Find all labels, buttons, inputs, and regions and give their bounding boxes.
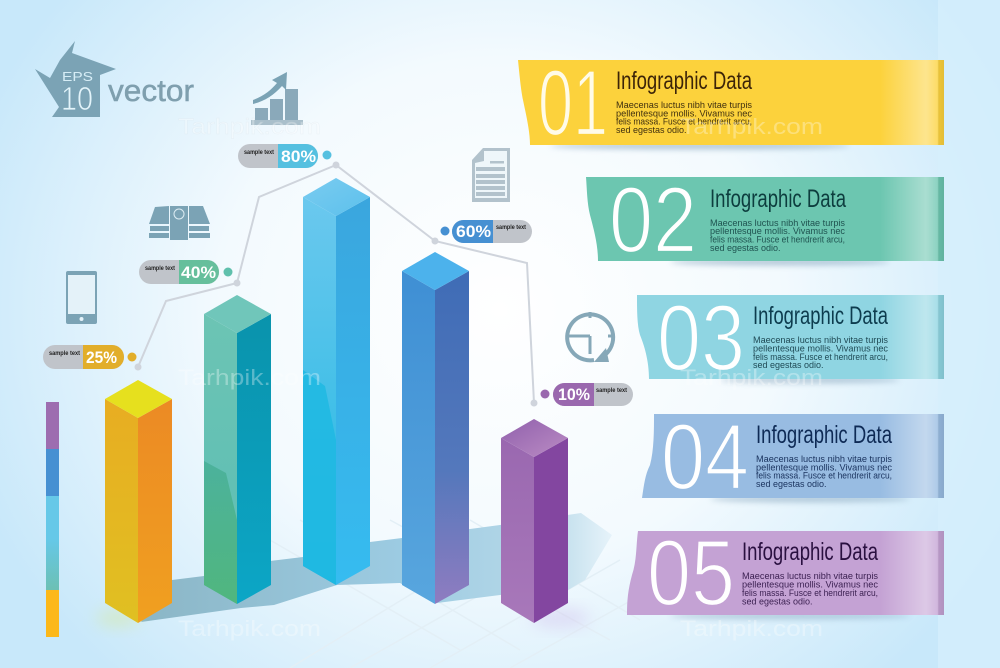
body 04: sed egestas odio. bbox=[756, 479, 827, 489]
panel: ribbon 03 bbox=[637, 285, 944, 390]
heading 01: Infographic Data bbox=[616, 67, 752, 95]
watermarks bbox=[178, 114, 823, 641]
body 03: sed egestas odio. bbox=[753, 360, 824, 370]
logo: EPS 10 vector: EPS bbox=[62, 69, 93, 84]
bar shadows on floor bbox=[141, 513, 612, 622]
body 01: felis massa. Fusce et hendrerit arcu, bbox=[616, 116, 752, 126]
body 01: Maecenas luctus nibh vitae turpis bbox=[616, 100, 753, 110]
body 03: felis massa. Fusce et hendrerit arcu, bbox=[753, 352, 888, 362]
bar 40% green bbox=[204, 295, 271, 604]
icon: document bbox=[472, 148, 510, 202]
pill: 80% bbox=[238, 144, 332, 168]
logo: EPS 10 vector: 10 bbox=[61, 80, 93, 117]
pill: 40% bbox=[139, 260, 232, 284]
pill: 60% bbox=[440, 220, 532, 243]
floor grid bbox=[270, 520, 650, 668]
heading 03: Infographic Data bbox=[753, 302, 888, 330]
watermarks: Tarhpik.com bbox=[178, 365, 321, 390]
number 03: 03 bbox=[657, 285, 745, 390]
bar 80% light blue bbox=[303, 178, 370, 585]
panel: ribbon 04 bbox=[642, 404, 944, 509]
legend colour strip bbox=[46, 402, 59, 637]
body 04: felis massa. Fusce et hendrerit arcu, bbox=[756, 470, 892, 480]
bar 10% purple bbox=[501, 419, 568, 623]
body 04 bbox=[756, 454, 893, 489]
body 05 bbox=[742, 571, 879, 606]
number 05: 05 bbox=[647, 520, 735, 625]
body 05: Maecenas luctus nibh vitae turpis bbox=[742, 571, 879, 581]
pill: 10% bbox=[540, 383, 633, 406]
icon: growth chart bbox=[251, 72, 303, 125]
pill: 25%: 25% bbox=[86, 348, 117, 367]
body 03 bbox=[753, 335, 889, 370]
body 05: sed egestas odio. bbox=[742, 596, 813, 606]
panel: ribbon 02 bbox=[586, 167, 944, 272]
pill: 25% bbox=[43, 345, 136, 369]
body 02 bbox=[710, 218, 846, 253]
pill: 40%: sample text bbox=[145, 266, 175, 272]
number 01: 01 bbox=[538, 50, 608, 155]
pill: 60%: sample text bbox=[496, 225, 526, 231]
watermarks: Tarhpik.com bbox=[680, 114, 823, 139]
body 03: Maecenas luctus nibh vitae turpis bbox=[753, 335, 888, 345]
pill: 60%: 60% bbox=[456, 222, 491, 241]
logo: EPS 10 vector: vector bbox=[108, 73, 194, 108]
icon: clock bbox=[566, 312, 614, 362]
watermarks: Tarhpik.com bbox=[680, 616, 823, 641]
watermarks: Tarhpik.com bbox=[680, 365, 823, 390]
heading 05: Infographic Data bbox=[742, 538, 878, 566]
body 02: sed egestas odio. bbox=[710, 243, 781, 253]
body 02: pellentesque mollis. Vivamus nec bbox=[710, 226, 846, 236]
bar 25% yellow bbox=[105, 380, 172, 623]
body 02: Maecenas luctus nibh vitae turpis bbox=[710, 218, 845, 228]
bar 60% blue bbox=[402, 252, 469, 604]
heading 02: Infographic Data bbox=[710, 185, 846, 213]
pill: 40%: 40% bbox=[181, 263, 216, 282]
right side strip bbox=[938, 0, 1000, 668]
body 04: Maecenas luctus nibh vitae turpis bbox=[756, 454, 893, 464]
pill: 25%: sample text bbox=[49, 351, 80, 357]
body 03: pellentesque mollis. Vivamus nec bbox=[753, 344, 889, 354]
number 04: 04 bbox=[661, 404, 749, 509]
connector line bbox=[134, 162, 538, 406]
icon: tablet bbox=[66, 271, 97, 324]
body 01: sed egestas odio. bbox=[616, 125, 687, 135]
body 04: pellentesque mollis. Vivamus nec bbox=[756, 462, 893, 472]
pill: 10%: sample text bbox=[596, 388, 627, 394]
logo: EPS 10 vector bbox=[35, 41, 194, 117]
bar glows bbox=[96, 608, 590, 628]
icon: money stack bbox=[149, 206, 210, 240]
heading 04: Infographic Data bbox=[756, 421, 892, 449]
body 01 bbox=[616, 100, 753, 135]
panel: ribbon 05 bbox=[627, 520, 944, 625]
watermarks: Tarhpik.com bbox=[178, 114, 321, 139]
body 05: pellentesque mollis. Vivamus nec bbox=[742, 580, 879, 590]
body 05: felis massa. Fusce et hendrerit arcu, bbox=[742, 588, 878, 598]
pill: 10%: 10% bbox=[558, 385, 590, 404]
number 02: 02 bbox=[609, 167, 697, 272]
watermarks: Tarhpik.com bbox=[178, 616, 321, 641]
pill: 80%: 80% bbox=[281, 147, 316, 166]
panel: ribbon 01 bbox=[518, 50, 944, 155]
body 01: pellentesque mollis. Vivamus nec bbox=[616, 108, 753, 118]
body 02: felis massa. Fusce et hendrerit arcu, bbox=[710, 234, 845, 244]
pill: 80%: sample text bbox=[244, 150, 274, 156]
